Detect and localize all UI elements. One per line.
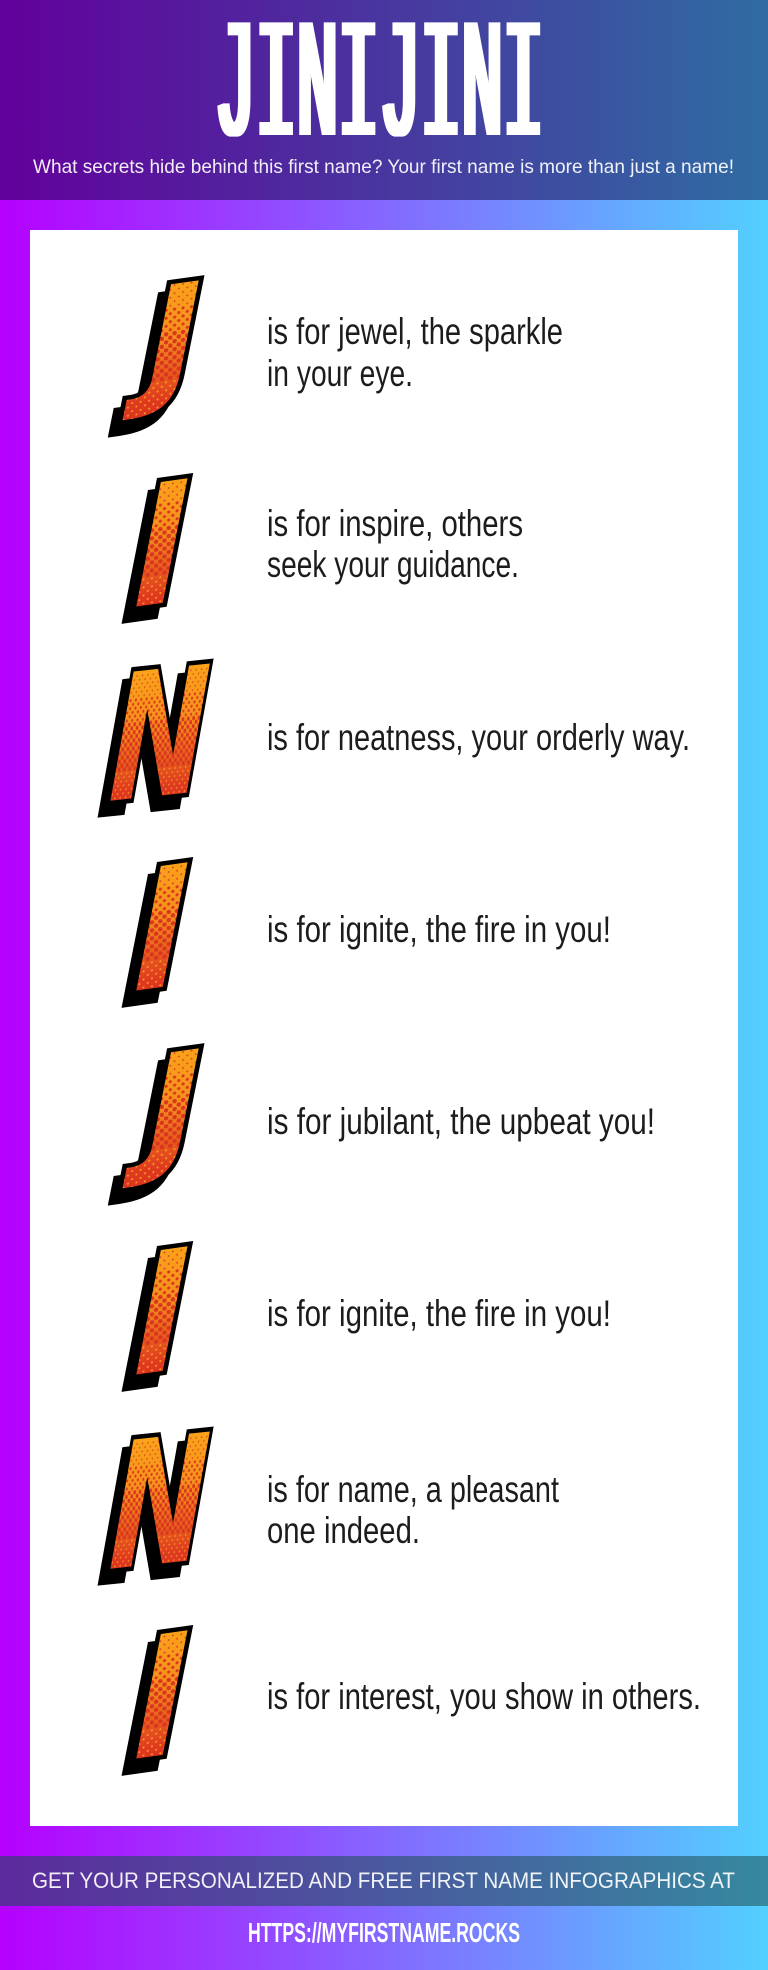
footer call to action: GET YOUR PERSONALIZED AND FREE FIRST NAME INFOGRAPHICS AT: [32, 1868, 735, 1893]
letter N: N: [106, 1398, 214, 1611]
row 3: N: [106, 630, 690, 843]
row 8: I: [133, 1593, 701, 1797]
text: jewel: [267, 311, 563, 394]
footer url: HTTPS://MYFIRSTNAME.ROCKS: [248, 1917, 520, 1948]
row 5: J: [122, 1020, 655, 1193]
text: inspire: [267, 503, 523, 585]
letter I: I: [133, 1593, 188, 1797]
letter J: J: [122, 1020, 202, 1193]
letter I: I: [133, 441, 188, 645]
row 7: N: [106, 1398, 560, 1611]
text: jewel: in your eye.: [267, 353, 413, 394]
text: inspire: is for inspire, others: [267, 503, 523, 544]
letter J: J: [122, 252, 202, 425]
subtitle: What secrets hide behind this first name? Your first name is more than just a name!: [33, 156, 734, 178]
row 6: I: [133, 1209, 611, 1413]
text: ignite: is for ignite, the fire in you!: [267, 1293, 611, 1334]
text: jewel: is for jewel, the sparkle: [267, 311, 563, 352]
text: name: [267, 1469, 560, 1551]
text: jubilant: is for jubilant, the upbeat you!: [267, 1101, 655, 1142]
text: inspire: seek your guidance.: [267, 544, 519, 585]
text: name: one indeed.: [267, 1510, 420, 1551]
text: name: is for name, a pleasant: [267, 1469, 560, 1510]
row 2: I: [133, 441, 523, 645]
letter I: I: [133, 1209, 188, 1413]
letter I: I: [133, 825, 188, 1029]
row 1: J: [122, 252, 563, 425]
row 4: I: [133, 825, 611, 1029]
header band: [0, 0, 768, 200]
text: ignite: is for ignite, the fire in you!: [267, 909, 611, 950]
footer band: [0, 1856, 768, 1906]
panel: white content card: [30, 230, 738, 1826]
letter N: N: [106, 630, 214, 843]
